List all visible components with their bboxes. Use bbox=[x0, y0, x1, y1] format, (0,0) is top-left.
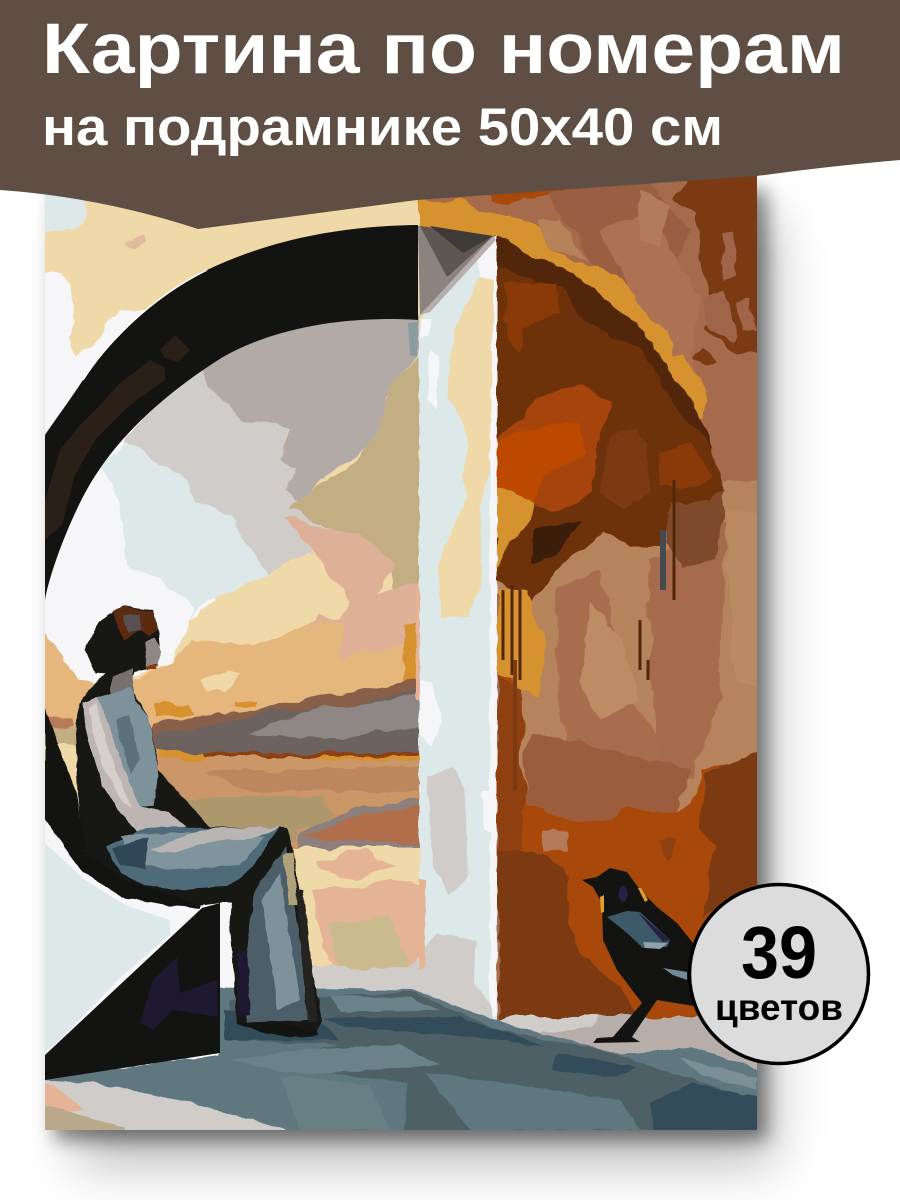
crow: wing bbox=[607, 911, 670, 948]
floor bbox=[30, 987, 770, 1140]
subtitle: на подрамнике 50х40 см bbox=[42, 98, 723, 157]
floor peach corner bbox=[30, 1082, 85, 1115]
floor slate bands bbox=[230, 992, 757, 1140]
lower left white and blue wall bbox=[45, 820, 234, 1053]
painting base fill bbox=[45, 308, 426, 1075]
header banner bbox=[0, 0, 900, 229]
column white blobs bbox=[428, 350, 440, 410]
column bbox=[410, 235, 497, 1020]
column base bbox=[419, 236, 497, 1020]
rust arch bbox=[493, 237, 725, 600]
hills orange glow bbox=[153, 700, 257, 717]
arch sky light grey bbox=[125, 360, 342, 575]
column cream streak bbox=[438, 277, 494, 617]
arch sky light blue bbox=[101, 442, 268, 620]
mid wall tan bbox=[497, 480, 770, 820]
badge: 39 colours bbox=[690, 884, 868, 1064]
column base grey bbox=[410, 933, 493, 1018]
black arch ring bbox=[45, 225, 418, 600]
upper left cream wall bbox=[45, 200, 425, 618]
arch sky dark grey bbox=[200, 312, 420, 505]
sunset orange band bbox=[45, 620, 406, 730]
far-left dusk strokes bbox=[48, 716, 74, 729]
top right dark brown patch bbox=[672, 176, 757, 354]
crow bbox=[582, 868, 700, 1043]
triangular seat block bbox=[45, 903, 220, 1080]
crow: tail feather bbox=[663, 968, 687, 980]
badge label: цветов bbox=[715, 987, 843, 1028]
arch sky tan bbox=[290, 355, 422, 597]
canvas drop shadow bbox=[55, 190, 775, 1165]
figure: hair bbox=[112, 605, 158, 640]
orange bands bbox=[418, 198, 542, 236]
figure: lap bbox=[107, 827, 280, 890]
figure: shin bbox=[243, 847, 317, 1023]
floor base bbox=[219, 987, 770, 1140]
ring brown mottling bbox=[45, 360, 165, 540]
painting bbox=[30, 170, 770, 1140]
figure: arm bbox=[83, 697, 187, 833]
seated woman figure bbox=[45, 605, 323, 1037]
wall footing bbox=[499, 1014, 757, 1070]
lower window panel bbox=[292, 845, 420, 967]
painted background layers bbox=[30, 170, 770, 1100]
column white edge bbox=[490, 235, 497, 1016]
floor tan corner bbox=[30, 1100, 130, 1140]
figure: foot bbox=[235, 1023, 318, 1037]
blue-grey edge smudge bbox=[408, 322, 418, 357]
upper right wall bbox=[417, 170, 770, 1020]
badge number: 39 bbox=[741, 911, 817, 994]
white gap between seat and leg bbox=[219, 900, 234, 990]
pink dab bbox=[123, 234, 148, 247]
arch sky white bbox=[45, 418, 216, 624]
top rust patch bbox=[490, 189, 570, 205]
crow: orange accents bbox=[600, 888, 648, 913]
figure: neck bbox=[110, 668, 133, 693]
white wall patch bbox=[45, 272, 145, 421]
upper left blue patch bbox=[45, 194, 87, 232]
sunset peach cloud bbox=[283, 517, 397, 605]
figure: face bbox=[145, 638, 162, 668]
figure: torso bbox=[97, 687, 158, 807]
column left tan edge bbox=[416, 590, 420, 700]
column top triangle bbox=[418, 226, 496, 315]
sea khaki island bbox=[187, 795, 332, 842]
figure: dark silhouette bbox=[75, 605, 323, 1033]
yellow patch at column bbox=[496, 488, 534, 568]
lower rust wall bbox=[497, 677, 770, 1017]
sea bbox=[150, 752, 422, 850]
lower yellow patch bbox=[497, 590, 547, 700]
column grey smudge bbox=[427, 767, 468, 895]
lower rust dark left bbox=[497, 850, 640, 1017]
lower rust dark right bbox=[699, 752, 757, 917]
rust drips bbox=[503, 480, 674, 790]
ring white highlight bbox=[83, 270, 207, 380]
floor grey left bbox=[30, 1080, 300, 1140]
title: Картина по номерам bbox=[42, 10, 845, 89]
floor navy bands bbox=[324, 1017, 543, 1047]
crow: eye patch bbox=[618, 886, 628, 902]
crow: body bbox=[582, 868, 700, 1043]
hills bbox=[152, 678, 416, 749]
figure: lower arch under body bbox=[45, 707, 200, 908]
sunset cream cloud bbox=[132, 552, 312, 680]
